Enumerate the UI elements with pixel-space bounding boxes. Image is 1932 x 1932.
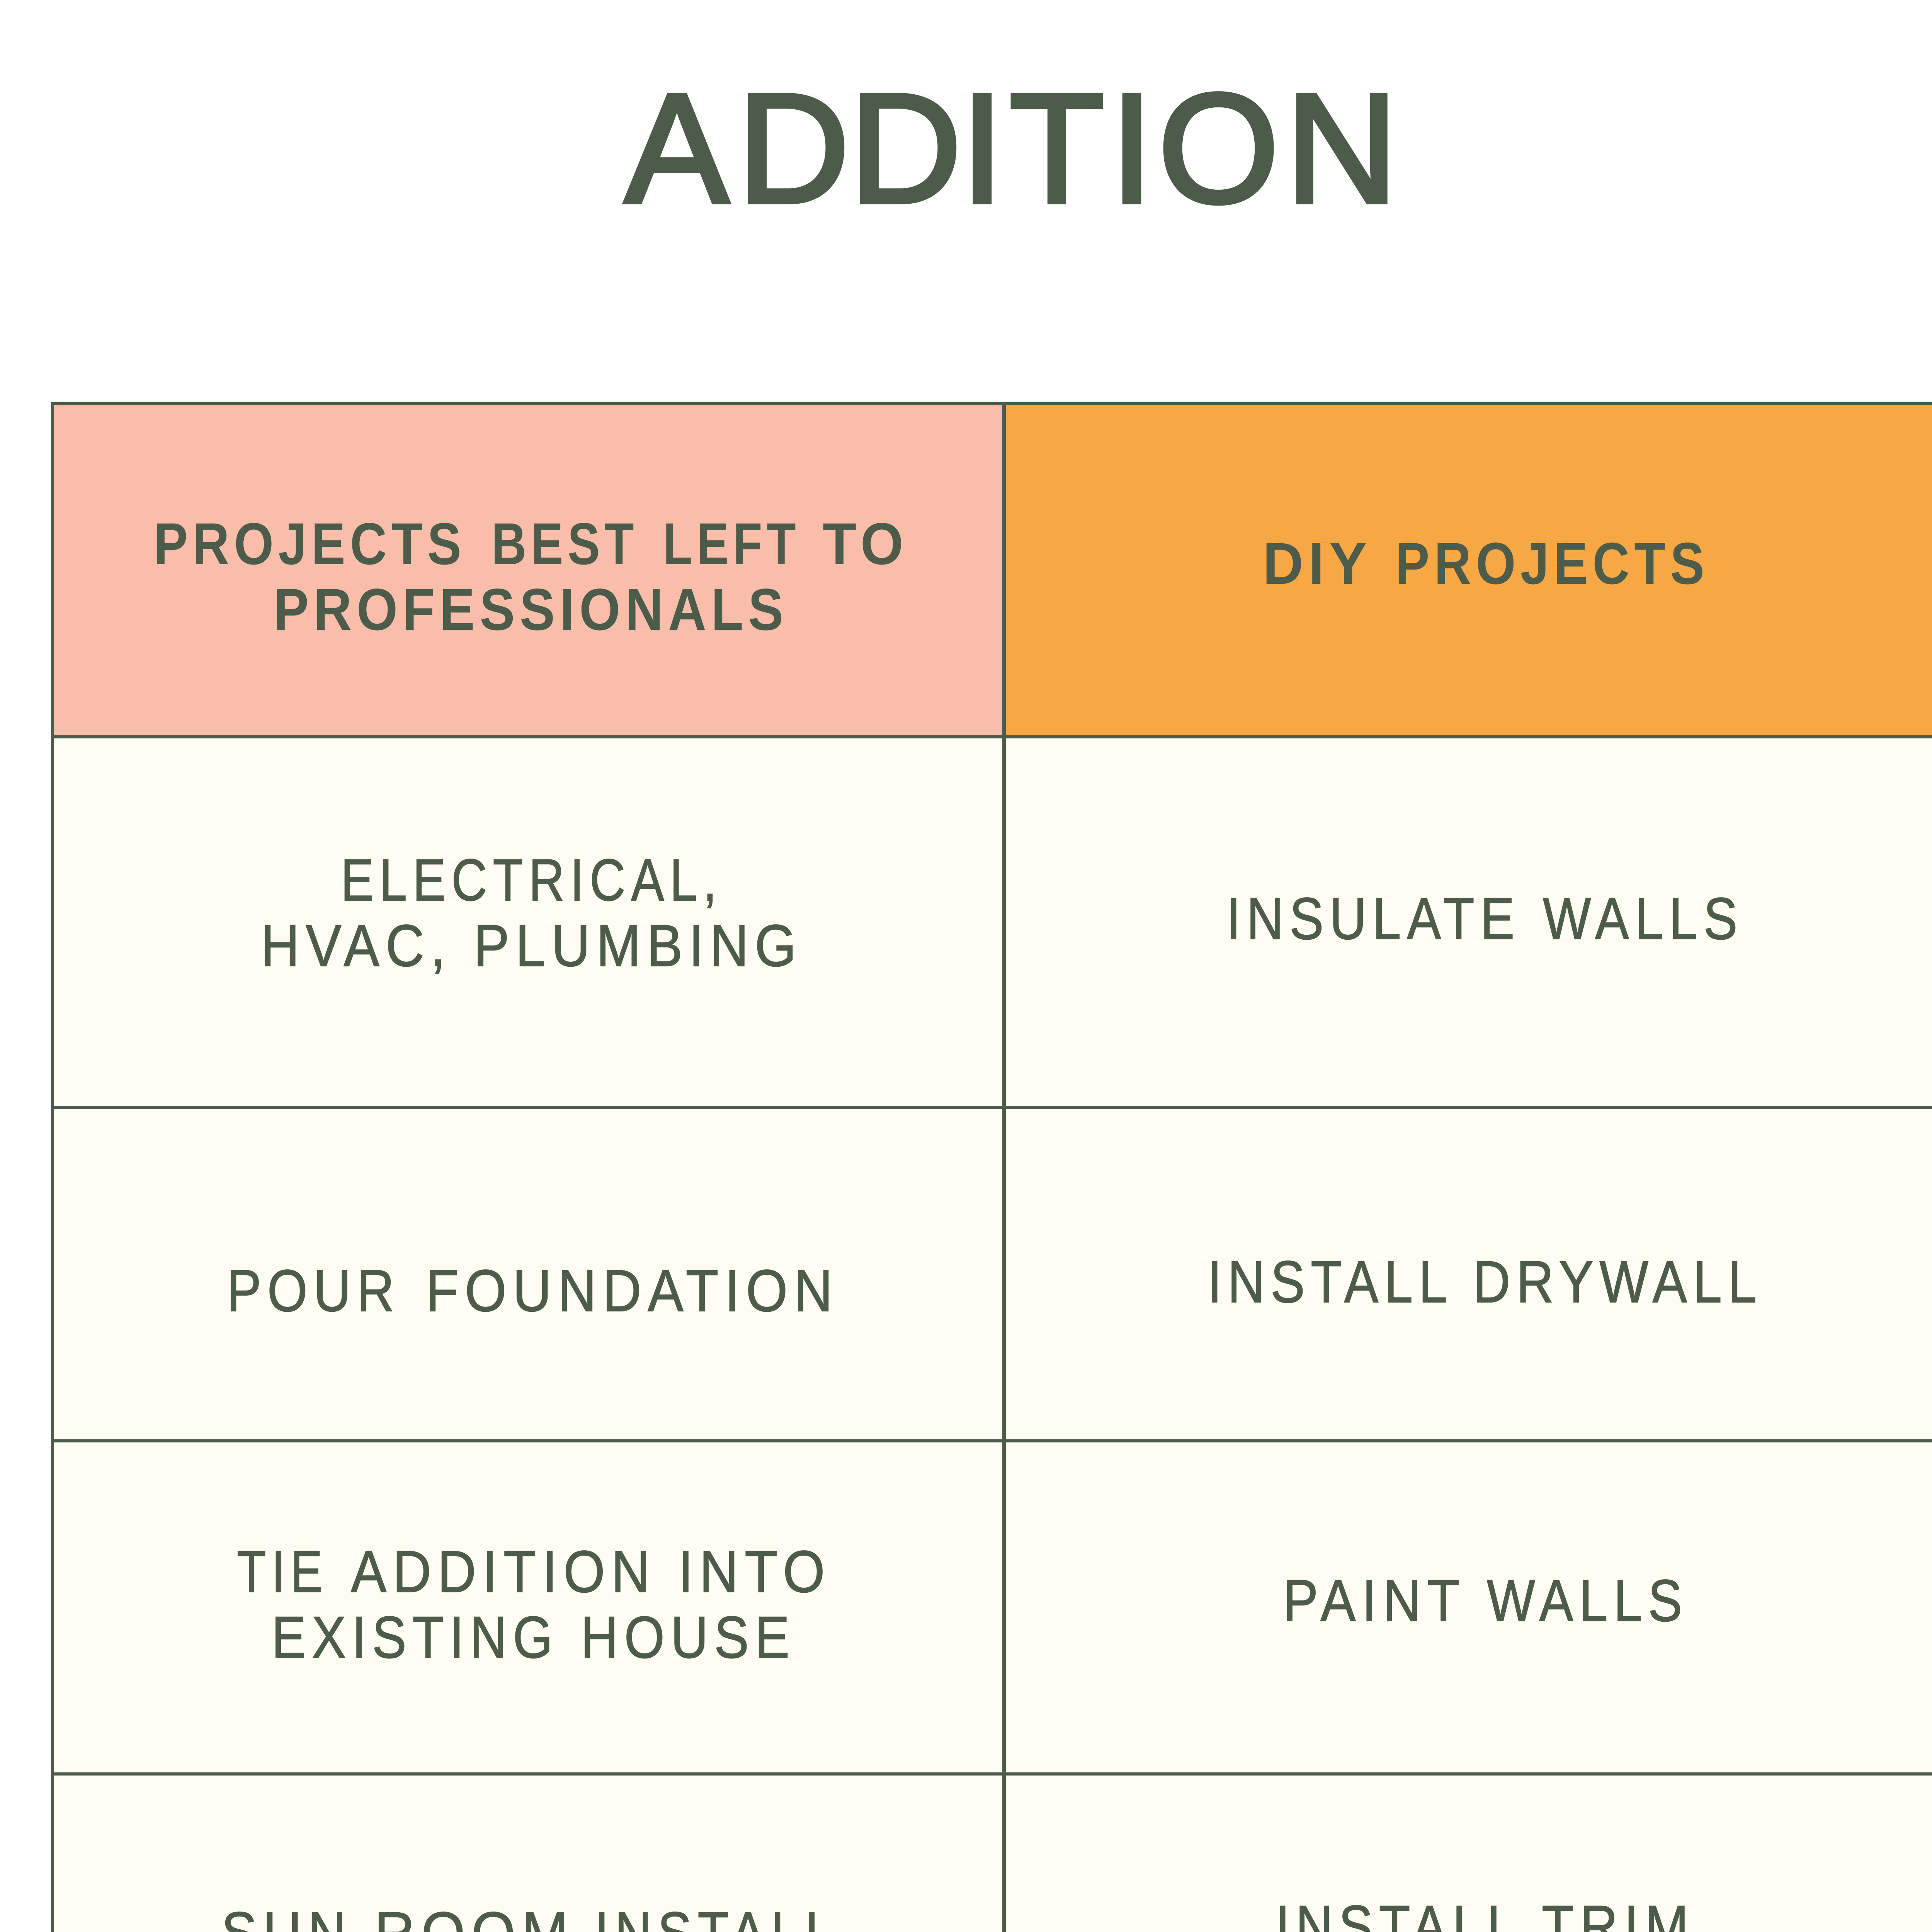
cell: insulate walls: WALLS bbox=[1543, 886, 1743, 952]
cell: insulate walls bbox=[1004, 737, 1932, 1107]
header cell: projects best left to professionals: BEST bbox=[492, 511, 638, 577]
cell: tie addition into existing house bbox=[53, 1441, 1004, 1774]
header cell: projects best left to professionals: PROFESSIONALS bbox=[274, 577, 788, 643]
header cell: projects best left to professionals bbox=[53, 404, 1004, 737]
header cell: DIY projects: PROJECTS bbox=[1395, 531, 1709, 597]
cell: paint walls bbox=[1004, 1441, 1932, 1774]
header cell: projects best left to professionals: PROJECTS bbox=[154, 511, 466, 577]
cell: electrical, HVAC, plumbing: HVAC, bbox=[261, 913, 452, 979]
cell: install drywall bbox=[1004, 1107, 1932, 1441]
cell: install drywall: INSTALL bbox=[1208, 1249, 1451, 1315]
cell: electrical, HVAC, plumbing: PLUMBING bbox=[474, 913, 803, 979]
header cell: projects best left to professionals: TO bbox=[823, 511, 908, 577]
cell: tie addition into existing house: EXISTING bbox=[272, 1604, 559, 1670]
cell: sun room install bbox=[53, 1774, 1004, 1932]
cell: paint walls: PAINT bbox=[1283, 1568, 1465, 1634]
cell: tie addition into existing house: TIE bbox=[237, 1539, 328, 1605]
cell: tie addition into existing house: HOUSE bbox=[581, 1604, 796, 1670]
cell: electrical, HVAC, plumbing: ELECTRICAL, bbox=[341, 847, 723, 913]
cell: install trim bbox=[1004, 1774, 1932, 1932]
header cell: DIY projects bbox=[1004, 404, 1932, 737]
title: ADDITION bbox=[625, 61, 1398, 235]
cell: paint walls: WALLS bbox=[1487, 1568, 1688, 1634]
cell: pour foundation bbox=[53, 1107, 1004, 1441]
cell: pour foundation: FOUNDATION bbox=[426, 1258, 839, 1324]
cell: tie addition into existing house: INTO bbox=[678, 1539, 831, 1605]
header cell: projects best left to professionals: LEFT bbox=[663, 511, 800, 577]
cell: tie addition into existing house: ADDITION bbox=[351, 1539, 656, 1605]
header cell: DIY projects: DIY bbox=[1263, 531, 1371, 597]
cell: pour foundation: POUR bbox=[227, 1258, 400, 1324]
cell: install drywall: DRYWALL bbox=[1473, 1249, 1763, 1315]
cell: insulate walls: INSULATE bbox=[1226, 886, 1520, 952]
comparison table bbox=[51, 402, 1932, 1932]
cell: electrical, HVAC, plumbing bbox=[53, 737, 1004, 1107]
